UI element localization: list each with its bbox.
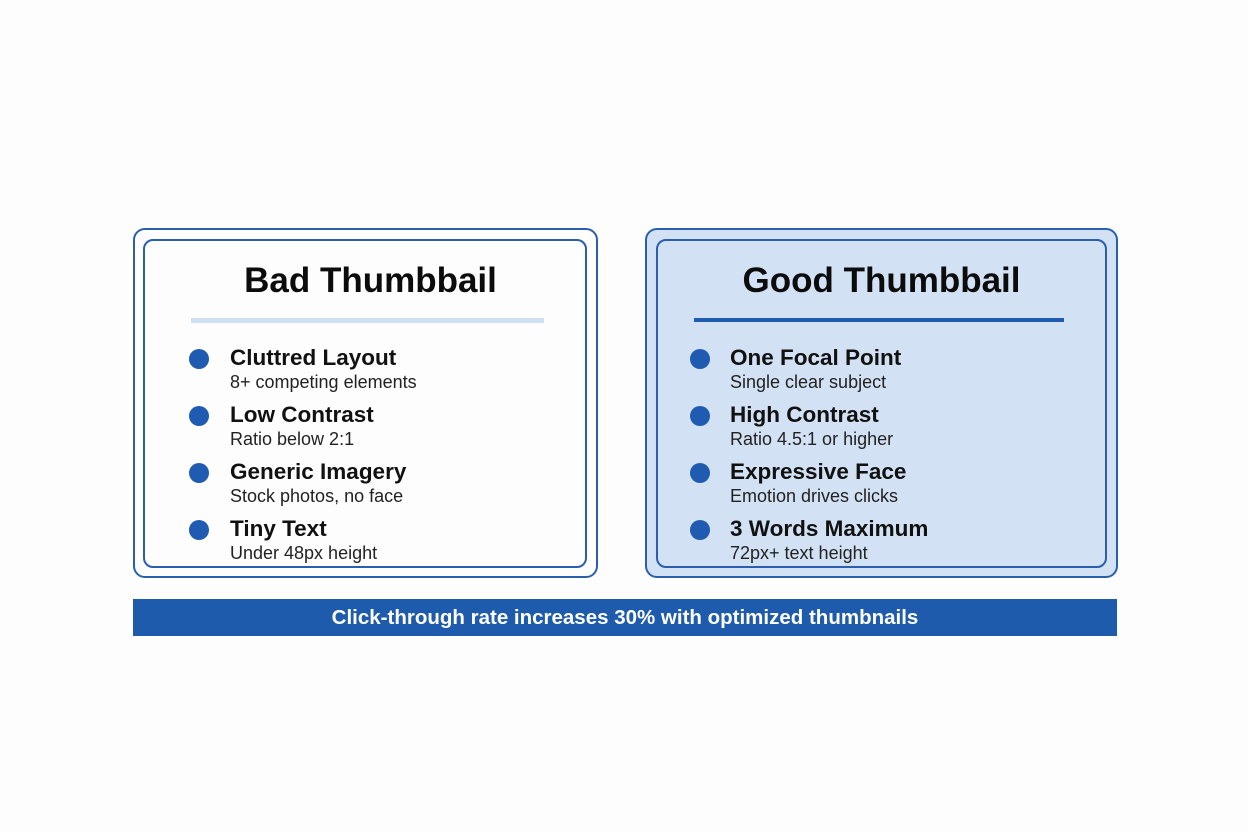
item: low contrast: Ratio below 2:1 bbox=[230, 429, 354, 449]
item: generic: Generic Imagery bbox=[230, 459, 406, 484]
item: focal: One Focal Point bbox=[730, 345, 901, 370]
panel: bad thumbnail bbox=[133, 228, 598, 578]
banner: Click-through rate increases 30% with optimized thumbnails bbox=[332, 606, 918, 629]
item: face bbox=[690, 459, 906, 506]
item: high contrast: Ratio 4.5:1 or higher bbox=[730, 429, 893, 449]
item: face: Expressive Face bbox=[730, 459, 906, 484]
item: generic: Stock photos, no face bbox=[230, 486, 403, 506]
item: generic bbox=[189, 459, 406, 506]
item: tiny text: Tiny Text bbox=[230, 516, 327, 541]
item: focal: Single clear subject bbox=[730, 372, 886, 392]
item: 3 words: 72px+ text height bbox=[730, 543, 868, 563]
panel: good thumbnail bbox=[645, 228, 1118, 578]
item: high contrast: High Contrast bbox=[730, 402, 879, 427]
item: 3 words: 3 Words Maximum bbox=[730, 516, 928, 541]
heading: bad: Bad Thumbbail bbox=[244, 261, 497, 300]
item: focal bbox=[690, 345, 901, 392]
item: 3 words bbox=[690, 516, 928, 563]
item: low contrast: Low Contrast bbox=[230, 402, 374, 427]
item: low contrast bbox=[189, 402, 374, 449]
item: cluttered bbox=[189, 345, 417, 392]
item: cluttered: 8+ competing elements bbox=[230, 372, 417, 392]
item: high contrast bbox=[690, 402, 893, 449]
item: tiny text bbox=[189, 516, 377, 563]
item: cluttered: Cluttred Layout bbox=[230, 345, 396, 370]
heading: good: Good Thumbbail bbox=[742, 261, 1021, 300]
item: face: Emotion drives clicks bbox=[730, 486, 898, 506]
banner bbox=[133, 599, 1117, 636]
item: tiny text: Under 48px height bbox=[230, 543, 377, 563]
